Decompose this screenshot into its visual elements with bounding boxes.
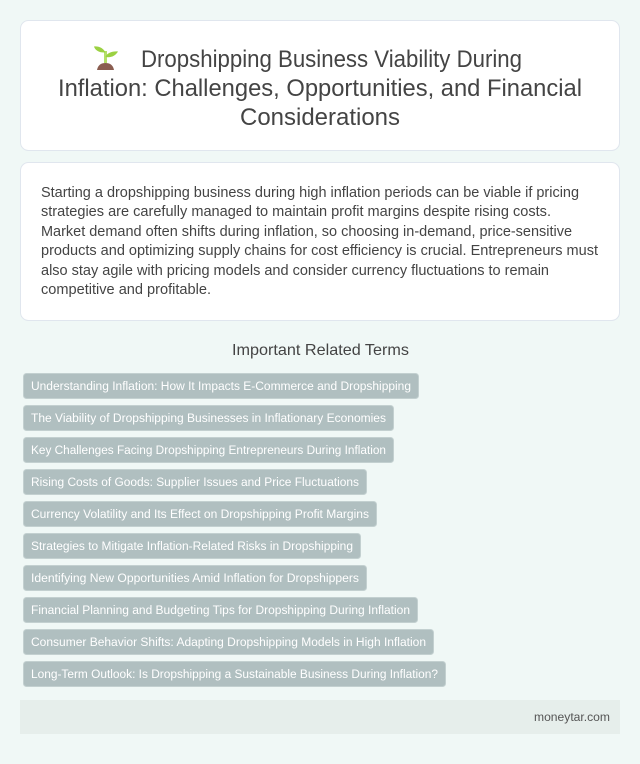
term 8: [24, 598, 418, 622]
term 2: [24, 406, 394, 430]
summary text: Market demand often shifts during inflation, so choosing in-demand, price-sensitive: [41, 224, 572, 240]
term 3: [24, 438, 394, 462]
term 2: The Viability of Dropshipping Businesses in Inflationary Economies: [31, 411, 386, 425]
term 7: Identifying New Opportunities Amid Inflation for Dropshippers: [31, 571, 359, 585]
title text: Considerations: [240, 104, 400, 131]
term 9: [24, 630, 434, 654]
term 6: Strategies to Mitigate Inflation-Related Risks in Dropshipping: [31, 539, 353, 553]
term 5: Currency Volatility and Its Effect on Dropshipping Profit Margins: [31, 507, 369, 521]
title text: [58, 46, 582, 131]
term 9: Consumer Behavior Shifts: Adapting Dropshipping Models in High Inflation: [31, 635, 426, 649]
title text: Inflation: Challenges, Opportunities, and Financial: [58, 75, 582, 102]
term 8: Financial Planning and Budgeting Tips for Dropshipping During Inflation: [31, 603, 410, 617]
term 4: Rising Costs of Goods: Supplier Issues and Price Fluctuations: [31, 475, 359, 489]
summary text: strategies are carefully managed to maintain profit margins despite rising costs.: [41, 204, 551, 220]
list of related terms: [24, 374, 446, 686]
heading: important related terms: Important Related Terms: [232, 342, 409, 359]
title text: Dropshipping Business Viability During: [141, 46, 522, 73]
term 7: [24, 566, 366, 590]
footer: [20, 700, 620, 734]
term 4: [24, 470, 366, 494]
icon: seedling: [94, 46, 118, 70]
term 3: Key Challenges Facing Dropshipping Entrepreneurs During Inflation: [31, 443, 386, 457]
summary text: [41, 185, 598, 298]
term 10: [24, 662, 446, 686]
panel: summary: [20, 162, 620, 320]
summary text: also stay agile with pricing models and consider currency fluctuations to remain: [41, 263, 549, 279]
summary text: Starting a dropshipping business during high inflation periods can be viable if pricing: [41, 185, 579, 201]
term 5: [24, 502, 376, 526]
term 1: Understanding Inflation: How It Impacts E-Commerce and Dropshipping: [31, 379, 411, 393]
summary text: competitive and profitable.: [41, 282, 211, 298]
term 1: [24, 374, 418, 398]
panel: title: [20, 20, 620, 150]
summary text: products and optimizing supply chains for cost efficiency is crucial. Entrepreneurs must: [41, 243, 598, 259]
footer source text: moneytar.com: [534, 710, 610, 724]
term 10: Long-Term Outlook: Is Dropshipping a Sustainable Business During Inflation?: [31, 667, 438, 681]
term 6: [24, 534, 360, 558]
